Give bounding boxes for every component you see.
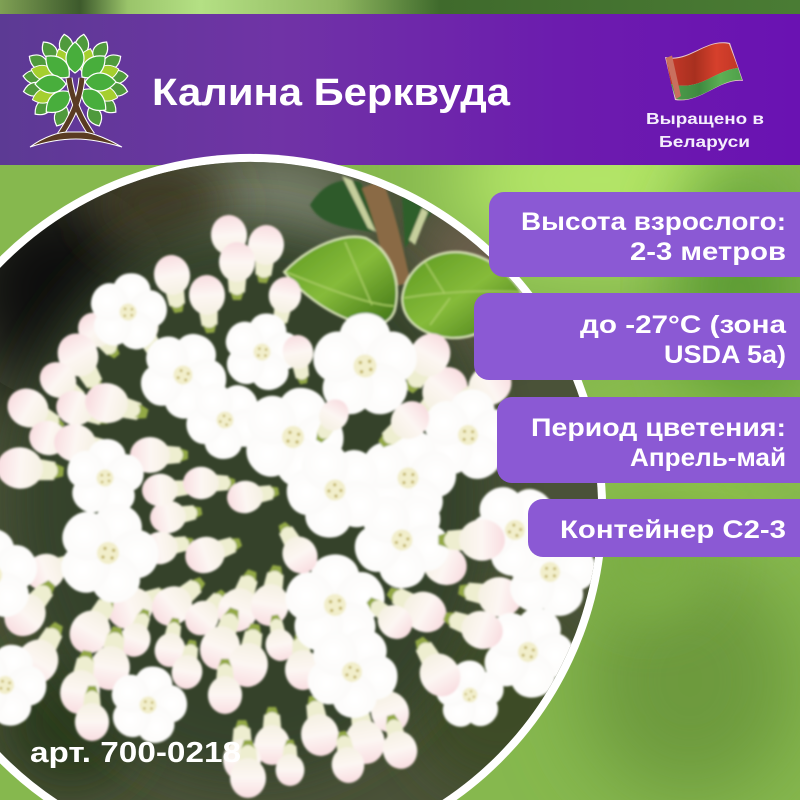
panel: frost hardiness: до -27°C (зона xyxy=(580,311,787,339)
panel: flowering period: Апрель-май xyxy=(630,444,786,472)
article number: арт. 700-0218 xyxy=(30,737,241,769)
panel: flowering period: Период цветения: xyxy=(531,414,786,442)
tree trunk and ground xyxy=(30,78,122,147)
panel: mature height xyxy=(489,192,800,277)
header band xyxy=(0,14,800,165)
flag caption xyxy=(646,111,764,151)
tree crown: lime leaves xyxy=(29,46,121,107)
logo: tree xyxy=(22,33,129,147)
tree crown: outer dark leaves xyxy=(22,33,129,129)
panel: mature height: 2-3 метров xyxy=(630,238,786,266)
panel: frost hardiness: USDA 5a) xyxy=(664,341,786,369)
stem xyxy=(372,184,400,285)
title: Калина Берквуда xyxy=(152,72,511,114)
right leaf xyxy=(402,252,522,338)
panel: container size: Контейнер С2-3 xyxy=(560,516,786,544)
upper dark leaf xyxy=(310,180,378,232)
buds xyxy=(0,214,525,798)
panel: mature height: Высота взрослого: xyxy=(521,208,786,236)
photo: viburnum flower cluster xyxy=(0,160,610,800)
front buds xyxy=(124,333,506,697)
panel: flowering period xyxy=(497,397,800,483)
panel: frost hardiness xyxy=(474,293,800,380)
panel: container size xyxy=(528,499,800,557)
tree crown: mid green leaves xyxy=(35,42,116,119)
flowers xyxy=(0,266,608,757)
flag caption: Беларуси xyxy=(659,134,750,151)
photo circle with white ring xyxy=(0,154,610,800)
icon: Belarus flag xyxy=(665,42,743,100)
flag caption: Выращено в xyxy=(646,111,764,128)
left leaf xyxy=(284,237,397,325)
